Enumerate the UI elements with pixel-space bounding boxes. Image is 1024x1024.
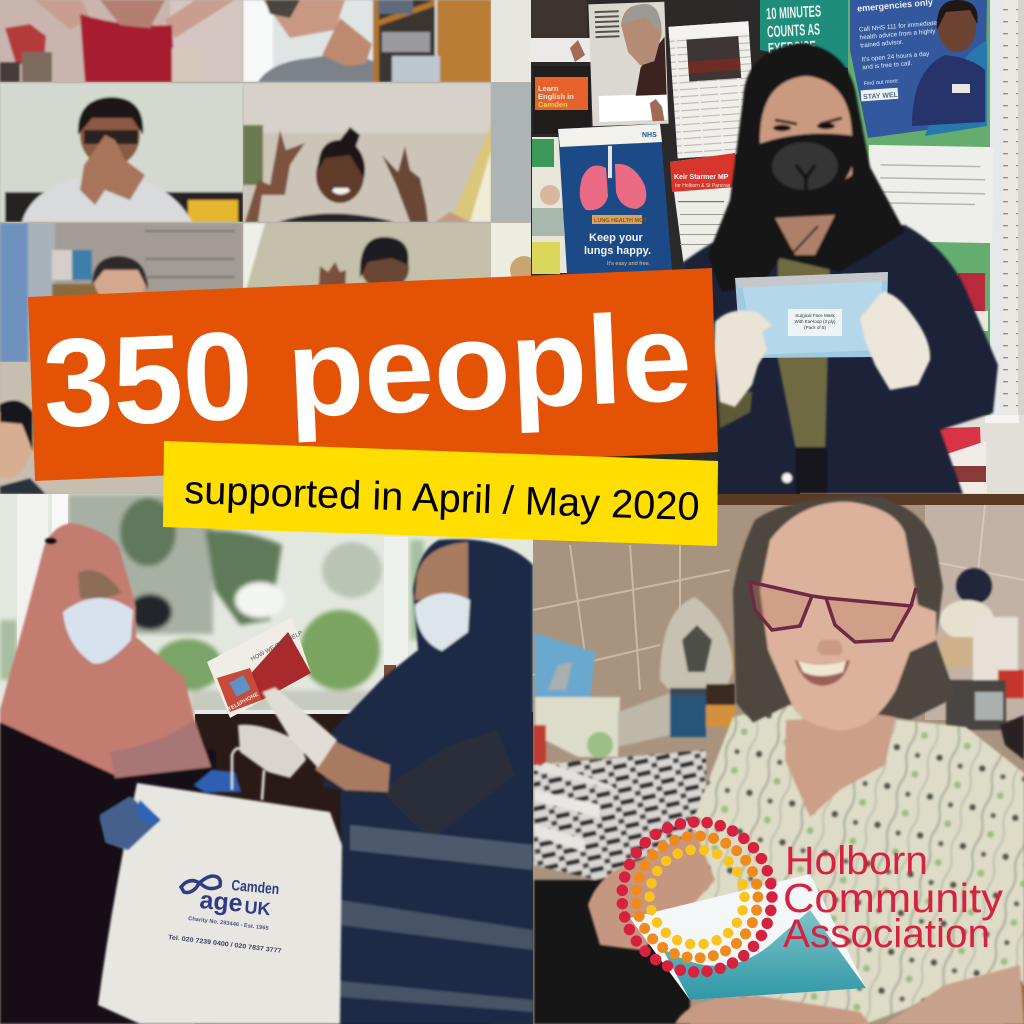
icon: dotted rings — [622, 822, 772, 972]
panel: bulletin board photo with masked woman — [531, 0, 1024, 494]
nurse portrait — [912, 0, 985, 126]
white brick wall and frame — [800, 0, 1024, 494]
poster: NHS 111 emergencies: and is free to call. — [862, 60, 913, 71]
poster: keep your lungs happy: Keep your — [589, 232, 644, 244]
poster: Keir Starmer MP: for Holborn & St Pancras — [675, 183, 731, 189]
video tile: person with headset and shelves — [0, 223, 243, 362]
Age UK logo: age — [198, 886, 244, 918]
poster: learn English in Camden — [533, 66, 591, 134]
video tile: man waving — [243, 223, 490, 288]
jacket highlight — [782, 473, 792, 483]
long dark hair — [708, 43, 905, 292]
olive top — [778, 250, 830, 448]
poster: learn English in Camden: Camden — [538, 100, 568, 109]
mask packet: With Ear-loop (3 ply) — [794, 319, 836, 324]
video tile: man at lower left — [0, 362, 164, 494]
mask packet — [735, 272, 888, 358]
white gloves — [714, 292, 930, 407]
poster: white letter on right — [867, 145, 994, 243]
hands and arms — [588, 830, 1024, 1024]
poster: NHS 111 emergencies: trained advisor. — [860, 39, 904, 49]
poster: Keir Starmer MP: Keir Starmer MP — [674, 174, 729, 181]
face — [758, 74, 854, 181]
tissue and boxes — [535, 633, 595, 700]
poster: NHS 111 emergencies — [850, 0, 987, 138]
poster: Keir Starmer MP — [670, 153, 740, 267]
Age UK logo: Charity No. 293446 - Est. 1965 — [188, 916, 269, 932]
video tile: right edge strip — [491, 0, 538, 284]
poster: NHS 111 emergencies: Find out more: — [863, 78, 900, 87]
stack of newspapers — [534, 750, 706, 1024]
yellow banner — [163, 441, 718, 546]
watercolour card — [630, 874, 866, 1000]
kitchen background — [533, 494, 1024, 1024]
board background — [531, 0, 848, 494]
red tape — [533, 725, 546, 765]
woman in navy hijab — [315, 539, 533, 1024]
leaflet: how we can help — [207, 617, 311, 718]
jacket — [682, 225, 998, 494]
video tile: woman making peace signs — [243, 83, 491, 222]
black mask — [753, 134, 856, 208]
tea cosy — [660, 597, 733, 693]
logo: Holborn Community Association — [622, 822, 1004, 972]
subheading: supported in April / May 2020: supported in April / May 2020 — [184, 468, 700, 529]
right shelf items — [956, 568, 992, 604]
video tile: man with glasses, hands over face — [0, 83, 243, 222]
logo wordmark: Community — [783, 875, 1004, 921]
poster: left green with photo — [532, 137, 568, 274]
icon: lungs — [580, 146, 646, 210]
green notice board section — [848, 0, 993, 415]
leaflet: how we can help: TELEPHONE — [227, 692, 260, 713]
poster: red notice bottom right — [938, 273, 988, 493]
poster: NHS 111 emergencies: Call NHS 111 for immediate — [859, 20, 938, 34]
logo wordmark: Association — [783, 912, 990, 956]
woman's blouse and hair — [690, 497, 1024, 1024]
leaflet: how we can help: HOW WE CAN HELP — [250, 630, 304, 663]
poster: keep your lungs happy — [558, 124, 672, 274]
video tile: person with earphones and bookshelf — [243, 0, 491, 82]
garden window background — [0, 494, 533, 1024]
Age UK logo — [168, 876, 282, 955]
foliage — [0, 494, 424, 712]
woman in pink hijab — [0, 523, 241, 1024]
cans — [670, 688, 706, 737]
poster: 10 minutes counts as exercise: EXERCISE — [768, 39, 817, 58]
Age UK logo: Tel. 020 7239 0400 / 020 7837 3777 — [168, 934, 282, 955]
poster: grey with portrait — [588, 2, 669, 126]
poster: keep your lungs happy: lungs happy. — [584, 245, 651, 257]
poster: keep your lungs happy: LUNG HEALTH MOT — [594, 218, 647, 224]
poster: 10 minutes counts as exercise: COUNTS AS — [767, 21, 821, 41]
poster: learn English in Camden: Learn — [538, 84, 559, 93]
logo wordmark — [783, 839, 1004, 956]
mask packet: Surgical Face Mask — [795, 313, 836, 318]
panel: smiling older woman holding card — [533, 494, 1024, 1024]
headline: 350 people: 350 people — [40, 286, 694, 454]
white Age UK carrier bag — [98, 783, 342, 1024]
kitchen clutter — [533, 568, 1024, 765]
logo wordmark: Holborn — [785, 839, 928, 883]
owl ornament — [733, 643, 763, 677]
chest and necklace — [775, 215, 835, 255]
poster: keep your lungs happy: NHS — [642, 132, 657, 139]
Age UK logo: Camden — [231, 877, 280, 898]
woman in black mask — [682, 43, 998, 494]
poster: 10 minutes counts as exercise: 10 MINUTES — [766, 3, 822, 23]
stay well badge — [861, 87, 903, 101]
orange banner — [28, 268, 718, 481]
stay well badge: STAY WELL — [863, 91, 903, 101]
poster: 10 minutes counts as exercise — [760, 0, 848, 68]
panel: video call grid — [0, 0, 538, 494]
poster: NHS 111 emergencies: health advice from a highly — [859, 28, 937, 41]
poster: top left dark — [531, 0, 592, 62]
panel: two women with Age UK bag — [0, 494, 533, 1024]
left cuff — [718, 390, 752, 428]
Age UK logo: UK — [244, 897, 271, 919]
poster: white document with photo — [668, 21, 758, 159]
white gloved hands and bag handle — [232, 687, 337, 800]
poster: NHS 111 emergencies: It's open 24 hours a day — [861, 50, 930, 63]
maroon glasses — [750, 582, 916, 642]
poster: learn English in Camden: English in — [538, 92, 574, 101]
poster: keep your lungs happy: It's easy and free. — [607, 261, 651, 267]
mask packet: (Pack of 5) — [804, 325, 826, 330]
video tile: person in red top — [0, 0, 243, 82]
